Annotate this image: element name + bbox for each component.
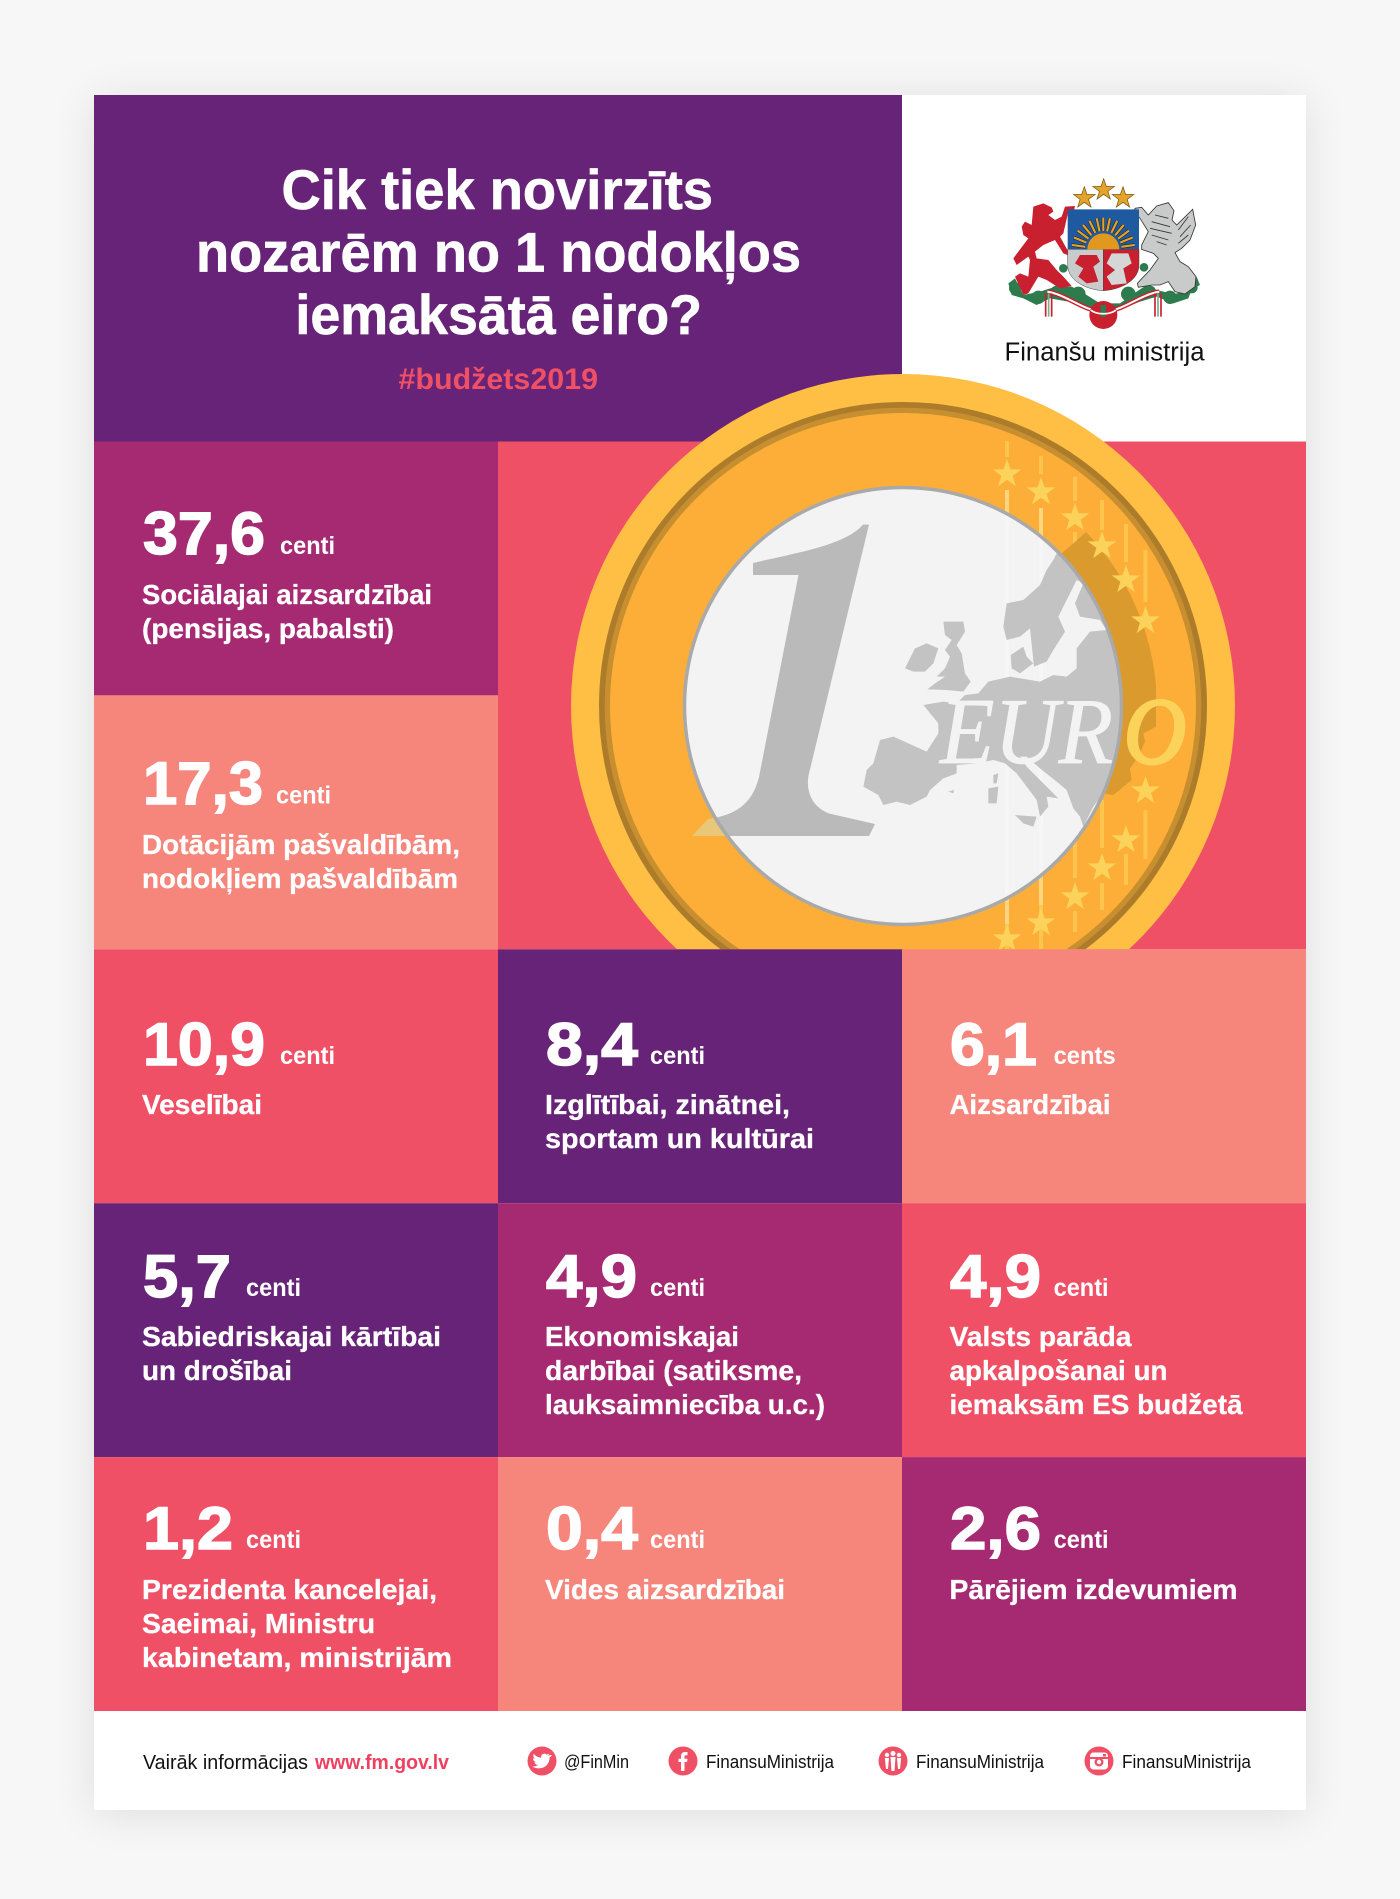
panel: 37,6 centi: (pensijas, pabalsti) xyxy=(142,613,394,644)
panel: 5,7 centi: 5,7 xyxy=(143,1243,231,1310)
title: iemaksātā eiro? xyxy=(295,283,702,346)
griffin xyxy=(1134,203,1196,294)
coin gold field xyxy=(610,413,1196,999)
gold stars xyxy=(993,459,1160,951)
panel: 8,4 centi: centi xyxy=(650,1042,705,1070)
panel: 8,4 centi: 8,4 xyxy=(546,1011,639,1078)
panel: 4,9 centi debt: 4,9 xyxy=(950,1243,1041,1310)
coin text: EURO: EUR xyxy=(938,680,1113,784)
panel: header xyxy=(94,95,902,442)
panel: 1,2 centi xyxy=(94,1457,498,1711)
panel: 4,9 centi economy: darbībai (satiksme, xyxy=(545,1355,802,1386)
panel: 5,7 centi xyxy=(94,1203,498,1457)
icon: instagram xyxy=(1084,1746,1114,1776)
panel: 37,6 centi: centi xyxy=(280,532,335,560)
draugiem name: FinansuMinistrija xyxy=(916,1752,1045,1772)
panel: 0,4 centi xyxy=(498,1457,902,1711)
panel: 2,6 centi: Pārējiem izdevumiem xyxy=(950,1574,1238,1605)
coin text: EURO xyxy=(938,699,1186,766)
twitter handle: @FinMin xyxy=(564,1752,629,1772)
icon: coat of arms xyxy=(1008,179,1200,329)
panel: 1,2 centi: Saeimai, Ministru xyxy=(142,1608,375,1639)
panel: 17,3 centi: Dotācijām pašvaldībām, xyxy=(142,829,460,860)
panel: 4,9 centi economy: Ekonomiskajai xyxy=(545,1321,739,1352)
facebook name: FinansuMinistrija xyxy=(706,1752,835,1772)
title: Cik tiek novirzīts xyxy=(282,158,713,221)
instagram name: FinansuMinistrija xyxy=(1122,1752,1252,1772)
coin outer rim xyxy=(571,374,1235,950)
shield xyxy=(1068,209,1139,291)
panel: 8,4 centi xyxy=(498,949,902,1203)
panel: 10,9 centi: centi xyxy=(280,1042,335,1070)
panel: 4,9 centi economy: centi xyxy=(650,1274,705,1302)
icon: stars xyxy=(1074,179,1134,207)
panel: 2,6 centi: 2,6 xyxy=(950,1495,1041,1562)
footer info text: Vairāk informācijas xyxy=(143,1751,308,1774)
panel: 6,1 cents: 6,1 xyxy=(950,1011,1037,1078)
panel: 1,2 centi: Prezidenta kancelejai, xyxy=(142,1574,437,1605)
hashtag: #budžets2019 xyxy=(398,363,598,396)
gold star lines xyxy=(1007,441,1146,949)
panel: 6,1 cents: Aizsardzībai xyxy=(950,1089,1110,1120)
panel: coin background xyxy=(498,442,1306,949)
panel: 2,6 centi xyxy=(902,1457,1306,1711)
numeral tip on gold xyxy=(692,818,725,836)
icon: twitter xyxy=(528,1746,556,1776)
panel: 2,6 centi: centi xyxy=(1054,1526,1109,1554)
panel: footer xyxy=(94,1711,1306,1810)
logo text: Finanšu ministrija xyxy=(1004,338,1205,366)
panel: 17,3 centi: centi xyxy=(276,781,331,809)
panel: 17,3 centi xyxy=(94,695,498,949)
panel: 5,7 centi: un drošībai xyxy=(142,1355,292,1386)
panel: logo xyxy=(902,95,1306,442)
lion xyxy=(1013,203,1075,295)
coin ring xyxy=(602,405,1204,1007)
panel: 1,2 centi: 1,2 xyxy=(143,1495,233,1562)
icon: draugiem xyxy=(878,1746,908,1776)
numeral 1 xyxy=(717,524,875,836)
oak wreath xyxy=(1008,263,1200,308)
faint lines on silver xyxy=(1007,490,1041,924)
panel: 4,9 centi debt xyxy=(902,1203,1306,1457)
coin text: EURO: O xyxy=(1124,680,1186,784)
panel: 4,9 centi economy xyxy=(498,1203,902,1457)
footer info text: www.fm.gov.lv xyxy=(314,1751,450,1774)
icon: facebook xyxy=(668,1746,698,1776)
panel: 37,6 centi: Sociālajai aizsardzībai xyxy=(142,579,432,610)
panel: 5,7 centi: centi xyxy=(246,1274,301,1302)
panel: 10,9 centi xyxy=(94,949,498,1203)
panel: 4,9 centi economy: lauksaimniecība u.c.) xyxy=(545,1389,825,1420)
ribbon xyxy=(1046,292,1161,317)
illustration: euro coin xyxy=(571,374,1235,950)
panel: 4,9 centi debt: iemaksām ES budžetā xyxy=(950,1389,1243,1420)
coin silver centre xyxy=(685,488,1121,924)
coin silver edge xyxy=(684,488,1122,924)
europe map xyxy=(863,553,1120,826)
panel: 0,4 centi: Vides aizsardzībai xyxy=(545,1574,785,1605)
panel: 4,9 centi economy: 4,9 xyxy=(546,1243,637,1310)
panel: 1,2 centi: kabinetam, ministrijām xyxy=(142,1642,452,1673)
europe map shadow on gold xyxy=(1053,532,1156,795)
panel: 37,6 centi: 37,6 xyxy=(143,500,265,567)
panel: 8,4 centi: Izglītībai, zinātnei, xyxy=(545,1089,790,1120)
panel: 5,7 centi: Sabiedriskajai kārtībai xyxy=(142,1321,441,1352)
panel: 17,3 centi: 17,3 xyxy=(143,750,263,817)
panel: 4,9 centi debt: apkalpošanai un xyxy=(950,1355,1168,1386)
panel: 4,9 centi debt: Valsts parāda xyxy=(950,1321,1132,1352)
panel: 6,1 cents: cents xyxy=(1054,1042,1116,1070)
panel: 37,6 centi xyxy=(94,442,498,695)
panel: 4,9 centi debt: centi xyxy=(1054,1274,1109,1302)
panel: 0,4 centi: 0,4 xyxy=(546,1495,639,1562)
title xyxy=(196,158,801,346)
panel: 17,3 centi: nodokļiem pašvaldībām xyxy=(142,863,458,894)
panel: 0,4 centi: centi xyxy=(650,1526,705,1554)
title: nozarēm no 1 nodokļos xyxy=(196,221,801,285)
panel: 10,9 centi: Veselībai xyxy=(142,1089,262,1120)
panel: 1,2 centi: centi xyxy=(246,1526,301,1554)
panel: 8,4 centi: sportam un kultūrai xyxy=(545,1123,814,1154)
panel: 6,1 cents xyxy=(902,949,1306,1203)
panel: 10,9 centi: 10,9 xyxy=(143,1011,265,1078)
